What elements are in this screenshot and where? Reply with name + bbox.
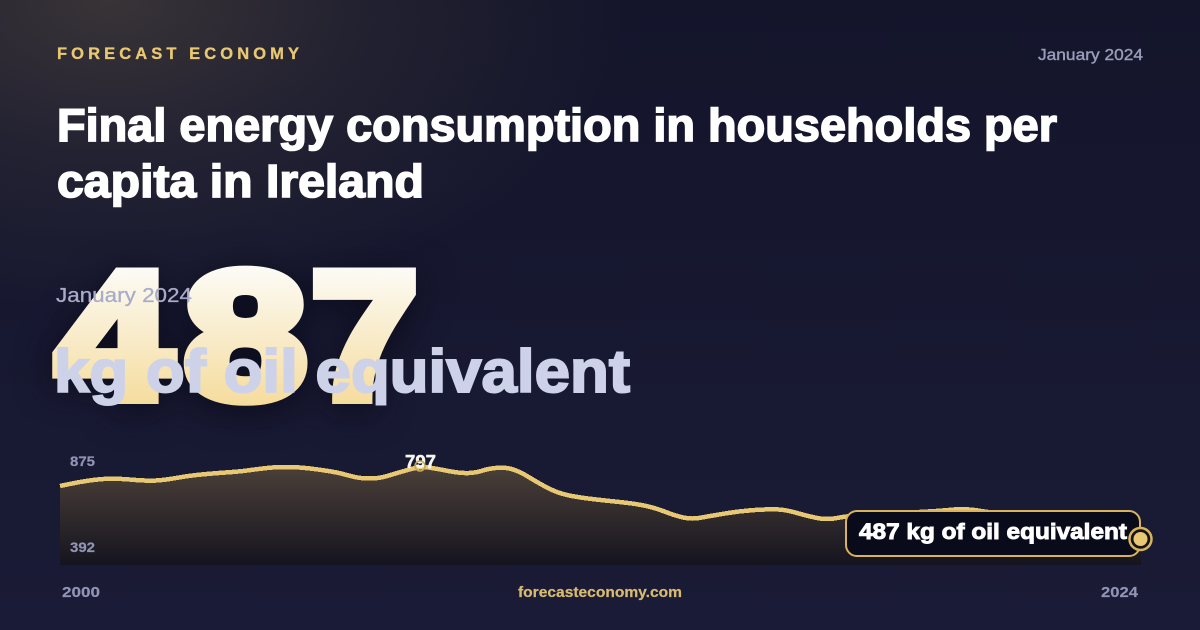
big value 487: 8 bbox=[184, 235, 307, 437]
end point marker bbox=[1130, 528, 1152, 550]
peak value label: 797 bbox=[405, 452, 436, 472]
chart line bbox=[60, 467, 1141, 539]
date under title: January 2024 bbox=[56, 285, 192, 307]
axis end year: 2024 bbox=[1101, 584, 1139, 601]
brand label: FORECAST ECONOMY bbox=[57, 45, 299, 63]
big value 487 bbox=[56, 235, 418, 437]
unit label: kg of oil equivalent bbox=[54, 338, 630, 405]
callout bbox=[846, 511, 1140, 556]
axis start year: 2000 bbox=[62, 584, 100, 601]
top-right date: January 2024 bbox=[1038, 47, 1143, 64]
title: capita in Ireland bbox=[57, 155, 424, 207]
axis max label: 875 bbox=[70, 453, 95, 469]
area chart bbox=[60, 467, 1141, 565]
title bbox=[57, 99, 1057, 207]
axis min label: 392 bbox=[70, 539, 95, 555]
title: Final energy consumption in households per bbox=[57, 99, 1057, 151]
chart area fill bbox=[60, 467, 1141, 565]
big value 487: 7 bbox=[311, 235, 418, 437]
callout: 487 kg of oil equivalent bbox=[859, 519, 1128, 544]
source website: forecasteconomy.com bbox=[518, 585, 682, 601]
peak marker bbox=[415, 461, 425, 471]
big value 487: 4 bbox=[56, 235, 172, 437]
